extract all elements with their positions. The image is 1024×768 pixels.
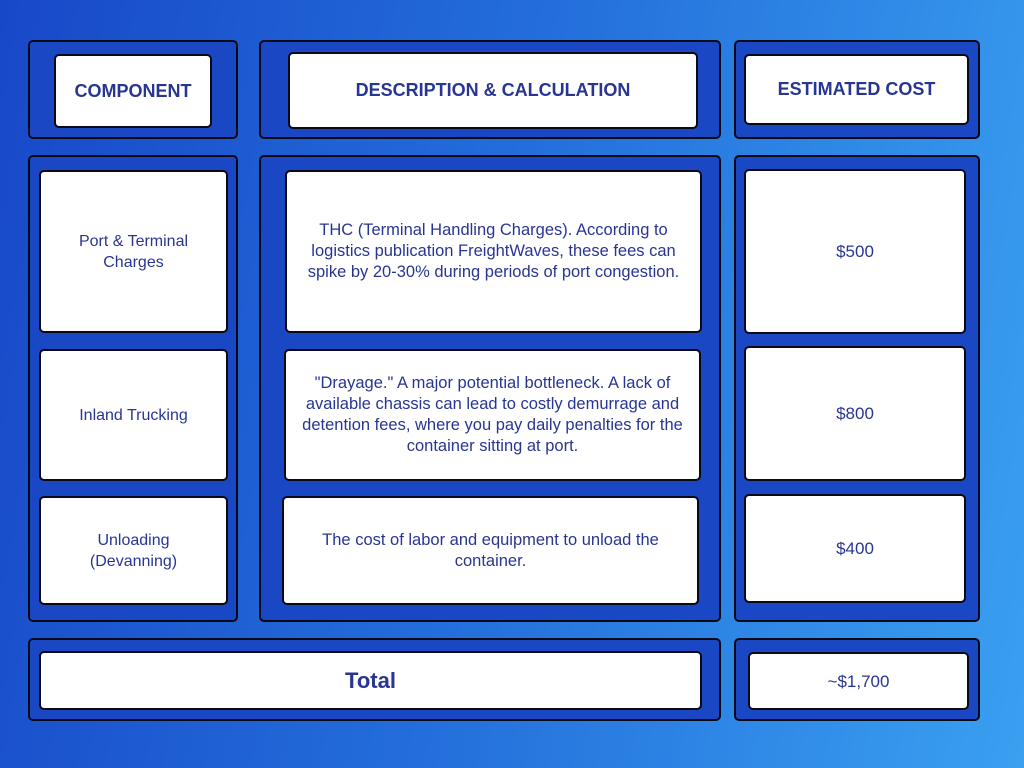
cell: unloading <box>39 496 228 605</box>
text: unloading description <box>282 496 699 605</box>
heading: cost <box>744 54 969 125</box>
panel: descriptions column <box>259 155 721 622</box>
cost: unloading <box>744 494 966 603</box>
cell: trucking <box>39 349 228 481</box>
heading: component: COMPONENT <box>74 80 192 100</box>
panel: component header <box>28 40 238 139</box>
cell: unloading: Unloading <box>97 532 170 548</box>
panel: components column <box>28 155 238 622</box>
panel: description header <box>259 40 721 139</box>
total label: Total <box>345 668 396 693</box>
total cost <box>748 652 969 710</box>
cost: port: $500 <box>836 242 874 261</box>
panel: costs column <box>734 155 980 622</box>
cost: port <box>744 169 966 334</box>
text: port description: THC (Terminal Handling Charges). According to logistics publication FreightWaves, these fees can spike by 20-30% during periods of port congestion. <box>308 221 679 281</box>
total label <box>39 651 702 710</box>
text: trucking description <box>284 349 701 481</box>
heading: description: DESCRIPTION & CALCULATION <box>356 80 630 100</box>
heading: component <box>54 54 212 128</box>
cost: trucking <box>744 346 966 481</box>
panel: total cost <box>734 638 980 721</box>
cell: port <box>39 170 228 333</box>
cost: unloading: $400 <box>836 539 874 558</box>
text: port description <box>285 170 702 333</box>
text: unloading description: The cost of labor and equipment to unload the container. <box>322 530 659 570</box>
cell: trucking: Inland Trucking <box>79 406 188 424</box>
heading: cost: ESTIMATED COST <box>778 79 935 99</box>
cost: trucking: $800 <box>836 404 874 423</box>
cell: port: Port & Terminal <box>79 232 188 250</box>
panel: total <box>28 638 721 721</box>
heading: description <box>288 52 698 129</box>
text: trucking description: "Drayage." A major potential bottleneck. A lack of available chassis can lead to costly demurrage and detention fees, where you pay daily penalties for the container sitting at port. <box>302 374 683 455</box>
total cost: ~$1,700 <box>828 672 889 690</box>
cell: unloading: (Devanning) <box>90 552 177 570</box>
cell: port: Charges <box>103 254 164 270</box>
panel: cost header <box>734 40 980 139</box>
